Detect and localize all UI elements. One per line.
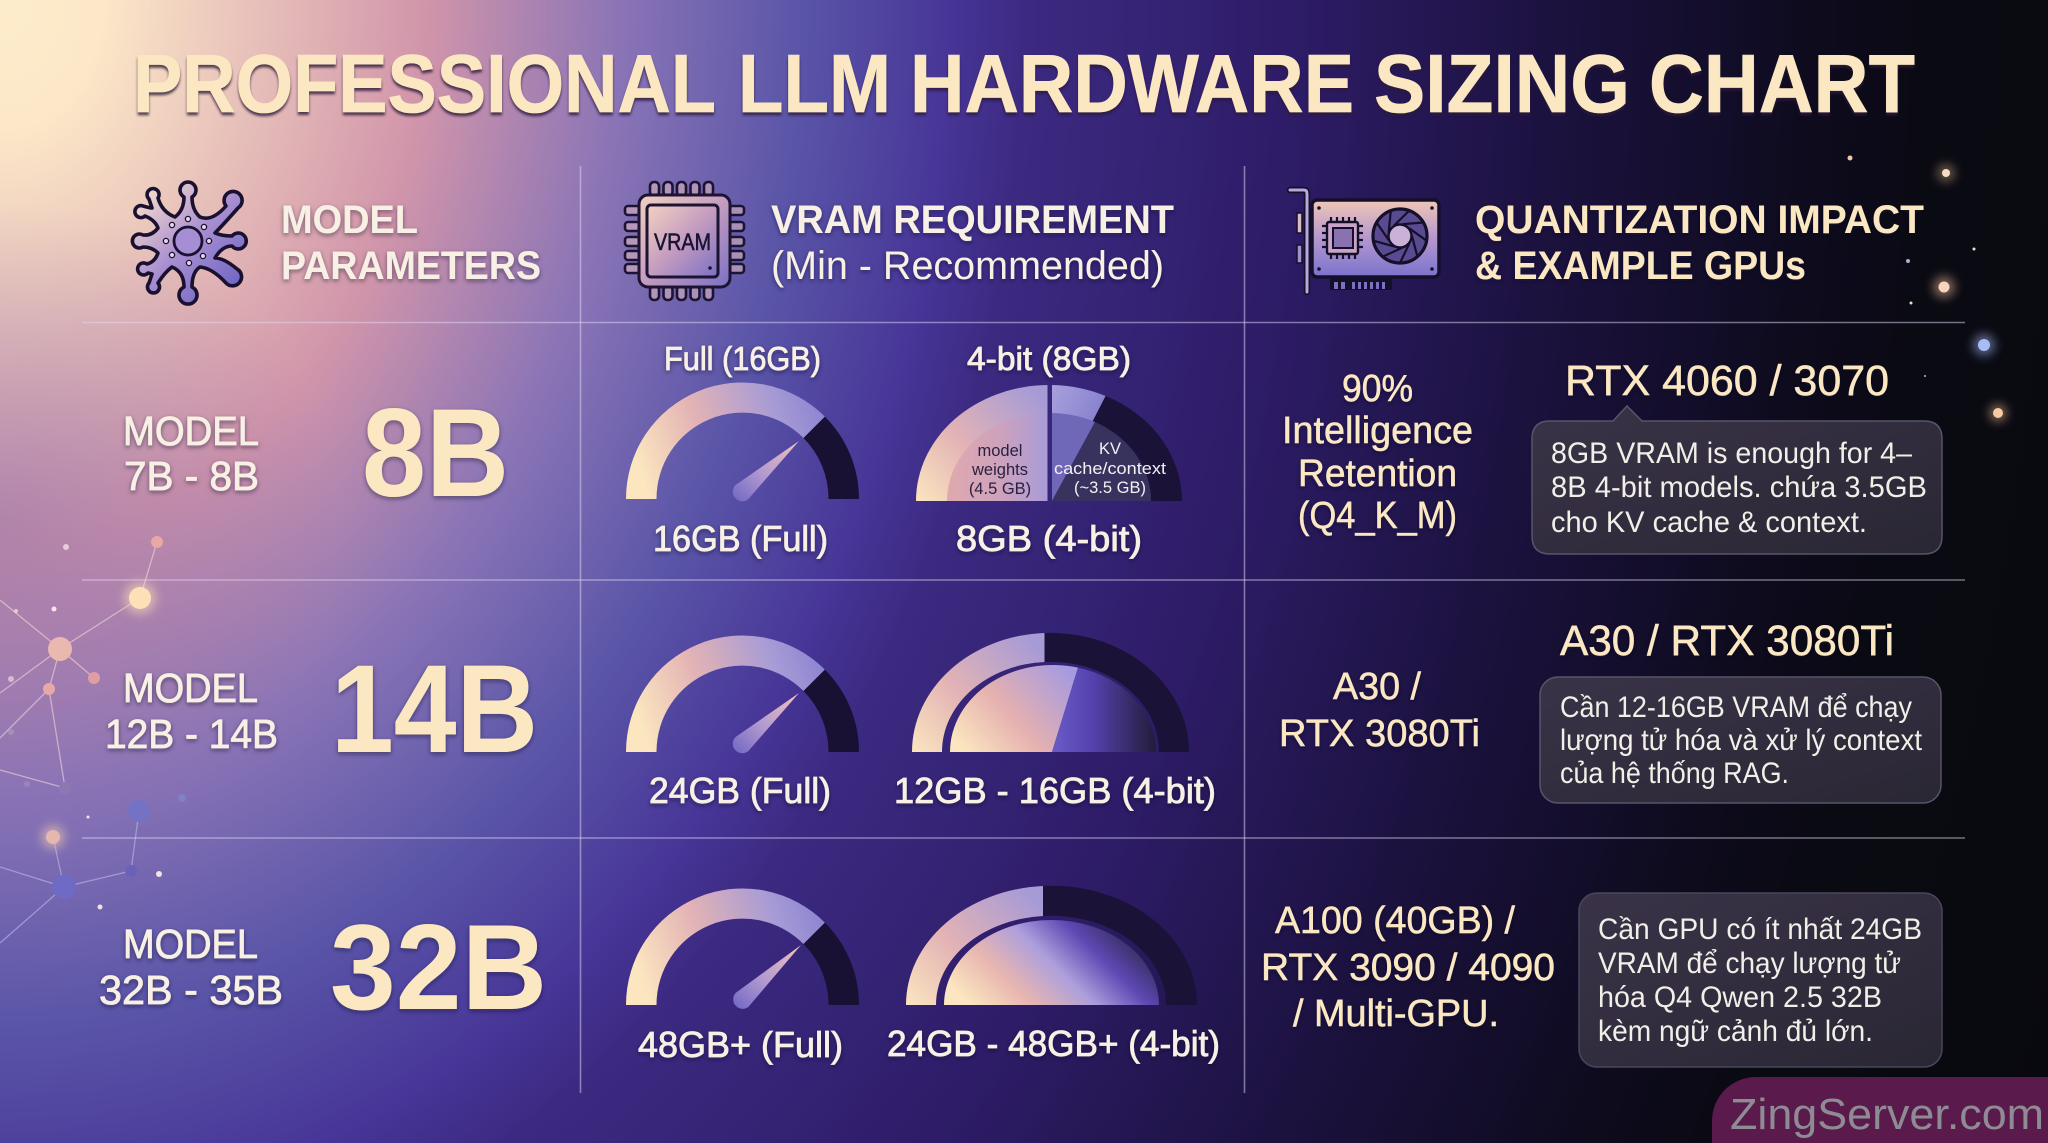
gauge: 4-bit 8GB split: weights bbox=[971, 461, 1028, 479]
callout: 8B note: 8GB VRAM is enough for 4– bbox=[1551, 437, 1912, 470]
gauge: 4-bit 8GB split bbox=[916, 340, 1182, 559]
example GPU heading: A30 / RTX 3080Ti bbox=[1560, 617, 1894, 665]
model size 32B: 32B bbox=[330, 899, 547, 1035]
gauge: 4-bit 8GB split: KV bbox=[1099, 440, 1121, 458]
gauge: 4-bit 12-16GB bbox=[894, 633, 1216, 811]
callout: 8B note: 8B 4-bit models. chứa 3.5GB bbox=[1551, 471, 1927, 504]
gauge: 4-bit 8GB split: cache/context bbox=[1054, 460, 1166, 478]
title: HARDWARE bbox=[910, 37, 1354, 130]
model range label bbox=[99, 921, 283, 1013]
gauge: full 16GB bbox=[626, 340, 859, 559]
heading: VRAM requirement: (Min - Recommended) bbox=[771, 244, 1164, 288]
model range label: 32B - 35B bbox=[99, 967, 283, 1013]
title bbox=[133, 37, 1915, 130]
callout: 32B note: Cần GPU có ít nhất 24GB bbox=[1598, 913, 1922, 946]
title: LLM bbox=[738, 37, 891, 130]
icon: VRAM chip: VRAM bbox=[654, 229, 711, 256]
gauge: 4-bit 8GB split: (4.5 GB) bbox=[969, 480, 1031, 498]
icon: neural virus model bbox=[132, 182, 246, 304]
gauge: 4-bit 24-48GB: 24GB - 48GB+ (4-bit) bbox=[887, 1023, 1220, 1064]
quantization retention: Retention bbox=[1298, 453, 1457, 495]
model size 8B: 8B bbox=[362, 384, 509, 523]
quantization retention: 90% bbox=[1342, 368, 1413, 410]
heading: quantization impact: QUANTIZATION IMPACT bbox=[1475, 198, 1924, 242]
gauge: 4-bit 8GB split: 8GB (4-bit) bbox=[956, 518, 1142, 559]
row 1: 8B model bbox=[123, 340, 1942, 559]
model range label bbox=[105, 665, 278, 757]
callout: 14B note: của hệ thống RAG. bbox=[1560, 757, 1789, 790]
quantization GPUs: RTX 3080Ti bbox=[1279, 713, 1480, 755]
quantization GPUs: A100 (40GB) / bbox=[1275, 900, 1515, 942]
icon: GPU card bbox=[1290, 190, 1439, 292]
heading: VRAM requirement bbox=[771, 198, 1174, 288]
gauge: 4-bit 24-48GB bbox=[887, 886, 1220, 1064]
callout: 32B note: VRAM để chạy lượng tử bbox=[1598, 947, 1901, 980]
title: SIZING bbox=[1374, 37, 1630, 130]
gauge: full 48GB bbox=[626, 888, 859, 1065]
gauge: 4-bit 12-16GB: 12GB - 16GB (4-bit) bbox=[894, 770, 1216, 811]
gauge: full 24GB bbox=[626, 635, 859, 811]
heading: model parameters: MODEL bbox=[281, 198, 418, 242]
heading: model parameters: PARAMETERS bbox=[281, 244, 541, 288]
callout: 32B note: kèm ngữ cảnh đủ lớn. bbox=[1598, 1015, 1873, 1048]
gauge: full 24GB: 24GB (Full) bbox=[649, 770, 831, 811]
model size 14B: 14B bbox=[331, 640, 538, 779]
callout: 14B note bbox=[1540, 677, 1941, 803]
callout: 14B note: Cần 12-16GB VRAM để chạy bbox=[1560, 691, 1912, 724]
title: PROFESSIONAL bbox=[133, 37, 716, 130]
watermark badge: ZingServer.com bbox=[1730, 1090, 2044, 1139]
gauge: full 16GB: 16GB (Full) bbox=[653, 518, 828, 559]
heading: VRAM requirement: VRAM REQUIREMENT bbox=[771, 198, 1174, 242]
quantization GPUs: A30 / bbox=[1333, 666, 1421, 708]
quantization GPUs: / Multi-GPU. bbox=[1293, 993, 1499, 1035]
row 2: 14B model bbox=[105, 617, 1941, 811]
callout: 32B note bbox=[1579, 893, 1942, 1067]
quantization retention bbox=[1282, 368, 1473, 537]
quantization GPUs bbox=[1279, 666, 1480, 755]
gauge: full 48GB: 48GB+ (Full) bbox=[638, 1024, 843, 1065]
table grid lines bbox=[82, 166, 1965, 1093]
decorative particles right bbox=[1848, 156, 2007, 422]
gauge: 4-bit 8GB split: 4-bit (8GB) bbox=[967, 340, 1131, 377]
icon: VRAM chip bbox=[625, 182, 744, 300]
watermark badge bbox=[1712, 1077, 2048, 1143]
callout: 8B note bbox=[1532, 406, 1942, 554]
model range label: MODEL bbox=[123, 408, 259, 454]
callout: 14B note: lượng tử hóa và xử lý context bbox=[1560, 724, 1923, 757]
model range label: MODEL bbox=[123, 665, 258, 711]
callout: 8B note: cho KV cache & context. bbox=[1551, 506, 1867, 539]
model range label: 12B - 14B bbox=[105, 711, 278, 757]
heading: quantization impact bbox=[1475, 198, 1924, 288]
quantization GPUs: RTX 3090 / 4090 bbox=[1261, 947, 1555, 989]
quantization retention: (Q4_K_M) bbox=[1298, 495, 1457, 537]
model range label: 7B - 8B bbox=[124, 453, 259, 499]
model range label bbox=[123, 408, 259, 499]
quantization GPUs bbox=[1261, 900, 1555, 1035]
gauge: 4-bit 8GB split: (~3.5 GB) bbox=[1074, 479, 1146, 497]
row 3: 32B model bbox=[99, 886, 1942, 1067]
quantization retention: Intelligence bbox=[1282, 410, 1473, 452]
heading: model parameters bbox=[281, 198, 541, 288]
gauge: full 16GB: Full (16GB) bbox=[664, 340, 821, 377]
callout: 32B note: hóa Q4 Qwen 2.5 32B bbox=[1598, 981, 1882, 1014]
decorative network left bbox=[0, 536, 186, 943]
model range label: MODEL bbox=[123, 921, 258, 967]
example GPU heading: RTX 4060 / 3070 bbox=[1565, 357, 1889, 405]
heading: quantization impact: & EXAMPLE GPUs bbox=[1475, 244, 1806, 288]
gauge: 4-bit 8GB split: model bbox=[978, 442, 1022, 460]
title: CHART bbox=[1649, 37, 1915, 130]
